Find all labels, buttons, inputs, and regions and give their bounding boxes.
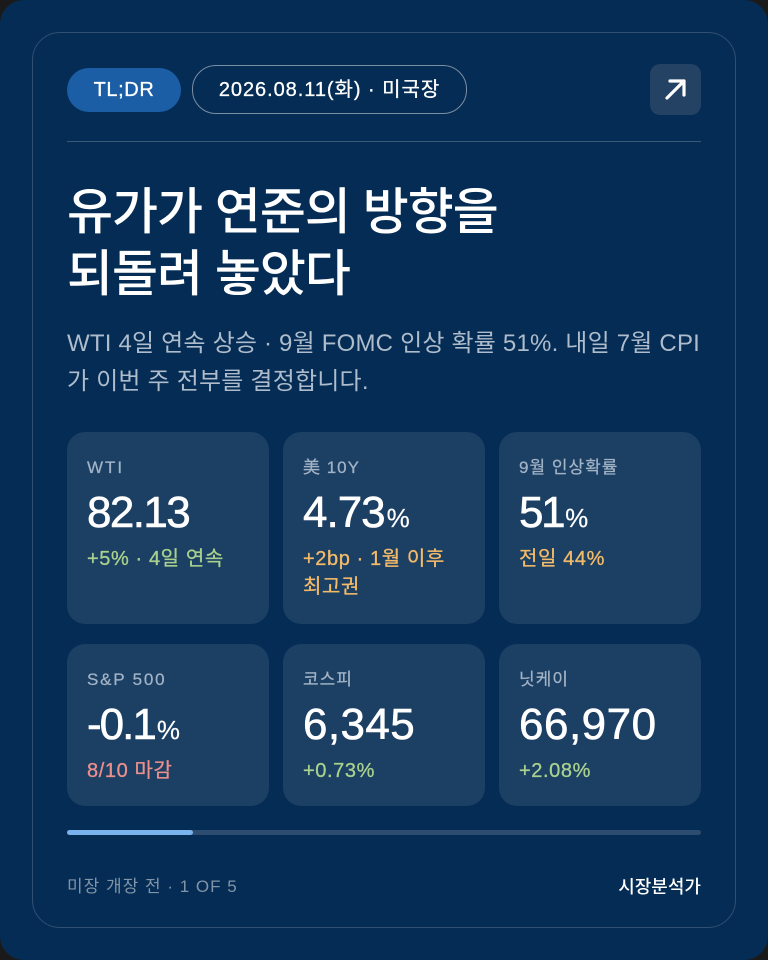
footer right text: 시장분석가 (618, 877, 701, 897)
stat card: Nikkei: 닛케이 (519, 670, 569, 689)
stat card: US 10Y: 4.73% (303, 488, 410, 537)
stat card: US 10Y: 최고권 (303, 576, 360, 598)
stat card: S&P 500: 8/10 마감 (87, 760, 172, 782)
stat card: September hike probability: 전일 44% (519, 548, 605, 570)
badge: TL;DR: TL;DR (94, 79, 154, 101)
stat card: KOSPI: 6,345 (303, 700, 415, 749)
title: 되돌려 놓았다 (67, 246, 350, 302)
stat card: KOSPI: +0.73% (303, 760, 375, 782)
title (67, 184, 498, 302)
date pill: 2026.08.11(화) · 미국장 (219, 79, 440, 101)
stat card: WTI: +5% · 4일 연속 (87, 548, 224, 570)
stat card: KOSPI: 코스피 (303, 670, 353, 689)
stat card: S&P 500 (67, 644, 269, 806)
stat card: S&P 500: S&P 500 (87, 670, 166, 689)
stat card: US 10Y (283, 432, 485, 624)
stat card: WTI (67, 432, 269, 624)
stat card: September hike probability: 51% (519, 488, 588, 537)
footer left text: 미장 개장 전 · 1 OF 5 (67, 877, 238, 896)
stat card: WTI: WTI (87, 458, 124, 477)
badge: TL;DR (67, 68, 181, 112)
progress bar (67, 830, 701, 835)
title: 유가가 연준의 방향을 (67, 184, 498, 240)
stat card: US 10Y: 美 10Y (303, 458, 360, 477)
stat card: WTI: 82.13 (87, 488, 189, 537)
stat card: September hike probability (499, 432, 701, 624)
stat card: September hike probability: 9월 인상확률 (519, 458, 618, 477)
summary text: WTI 4일 연속 상승 · 9월 FOMC 인상 확률 51%. 내일 7월 CPI (67, 330, 700, 357)
date pill (192, 65, 467, 114)
stat card: Nikkei: 66,970 (519, 700, 657, 749)
summary text: 가 이번 주 전부를 결정합니다. (67, 368, 369, 395)
stat card: S&P 500: -0.1% (87, 700, 180, 749)
stat card: Nikkei (499, 644, 701, 806)
stat card: Nikkei: +2.08% (519, 760, 591, 782)
summary text (67, 330, 700, 395)
icon: share arrow (650, 64, 701, 115)
stat card: KOSPI (283, 644, 485, 806)
stat card: US 10Y: +2bp · 1월 이후 (303, 548, 445, 570)
